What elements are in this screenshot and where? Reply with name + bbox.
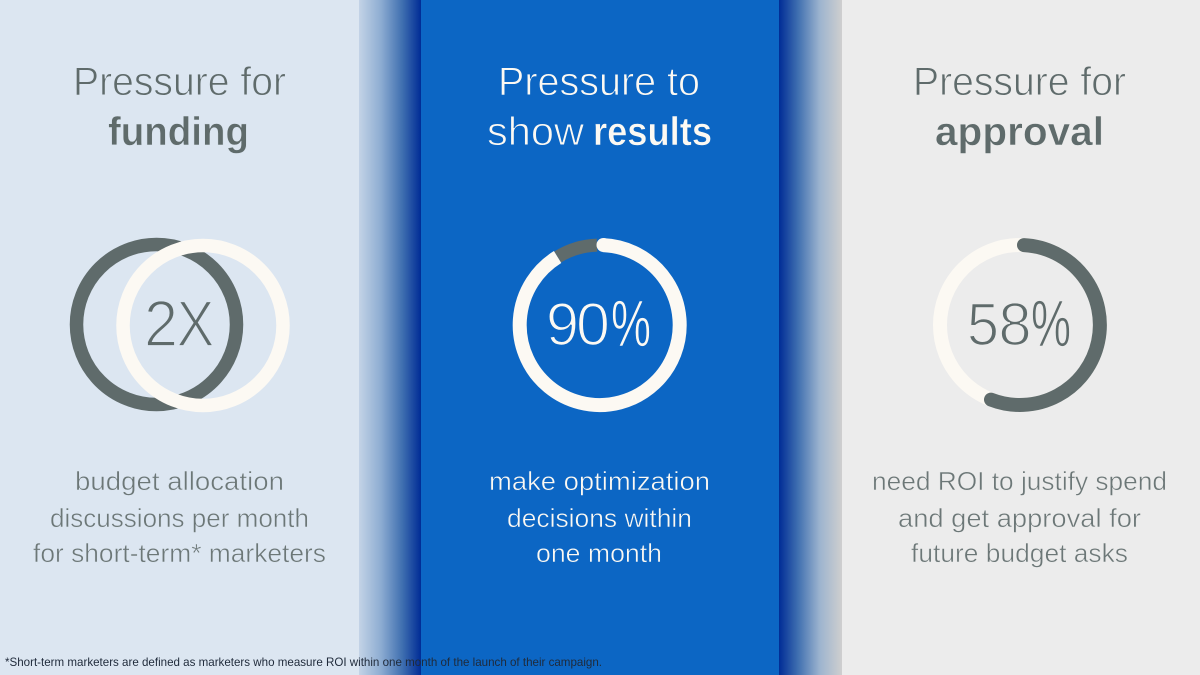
- text: optimization description: [489, 466, 710, 568]
- icon: two overlapping rings: [76, 244, 283, 406]
- stat: 90%: 9: [546, 291, 579, 358]
- stat: 2X: 2: [144, 287, 178, 360]
- icon: 90 percent ring: [520, 238, 680, 405]
- heading: pressure for approval: approval: [935, 110, 1104, 154]
- heading: pressure to show results: Pressure to: [498, 60, 700, 104]
- footnote: *Short-term marketers are defined as marketers who measure ROI within one month of the launch of their campaign.: [5, 655, 602, 669]
- text: optimization description: make optimization: [489, 466, 710, 496]
- stat: 58%: 8: [998, 291, 1032, 358]
- text: ROI description: future budget asks: [911, 538, 1128, 568]
- heading: pressure for funding: [73, 60, 286, 154]
- heading: pressure for approval: [913, 60, 1126, 154]
- stat: 90%: 0: [576, 291, 610, 358]
- stat: 90%: [546, 286, 651, 360]
- stat: 58%: 5: [967, 291, 999, 358]
- panel: results: [421, 0, 779, 675]
- text: optimization description: decisions within: [507, 503, 692, 533]
- stat: 58%: %: [1031, 286, 1071, 360]
- heading: pressure for funding: funding: [108, 110, 249, 154]
- icon: 58 percent ring: [940, 245, 1100, 405]
- text: ROI description: need ROI to justify spend: [872, 466, 1167, 496]
- stat: 90%: %: [611, 286, 651, 360]
- heading: pressure for funding: Pressure for: [73, 60, 286, 104]
- text: ROI description: and get approval for: [898, 503, 1141, 533]
- text: budget allocation description: for short-term* marketers: [33, 538, 326, 568]
- heading: pressure to show results: results: [593, 110, 712, 154]
- text: optimization description: one month: [536, 538, 662, 568]
- gradient band: left of results panel: [359, 0, 421, 675]
- text: budget allocation description: [33, 466, 326, 568]
- gradient band: right of results panel: [779, 0, 842, 675]
- heading: pressure for approval: Pressure for: [913, 60, 1126, 104]
- heading: pressure to show results: show: [487, 110, 584, 154]
- stat: 58%: [967, 286, 1071, 360]
- heading: pressure to show results: [487, 60, 712, 154]
- panel: approval: [842, 0, 1200, 675]
- panel: funding: [0, 0, 360, 675]
- text: ROI description: [872, 466, 1167, 568]
- text: budget allocation description: discussions per month: [50, 503, 309, 533]
- stat: 2X: [144, 287, 214, 360]
- text: budget allocation description: budget allocation: [75, 466, 284, 496]
- stat: 2X: X: [176, 287, 214, 360]
